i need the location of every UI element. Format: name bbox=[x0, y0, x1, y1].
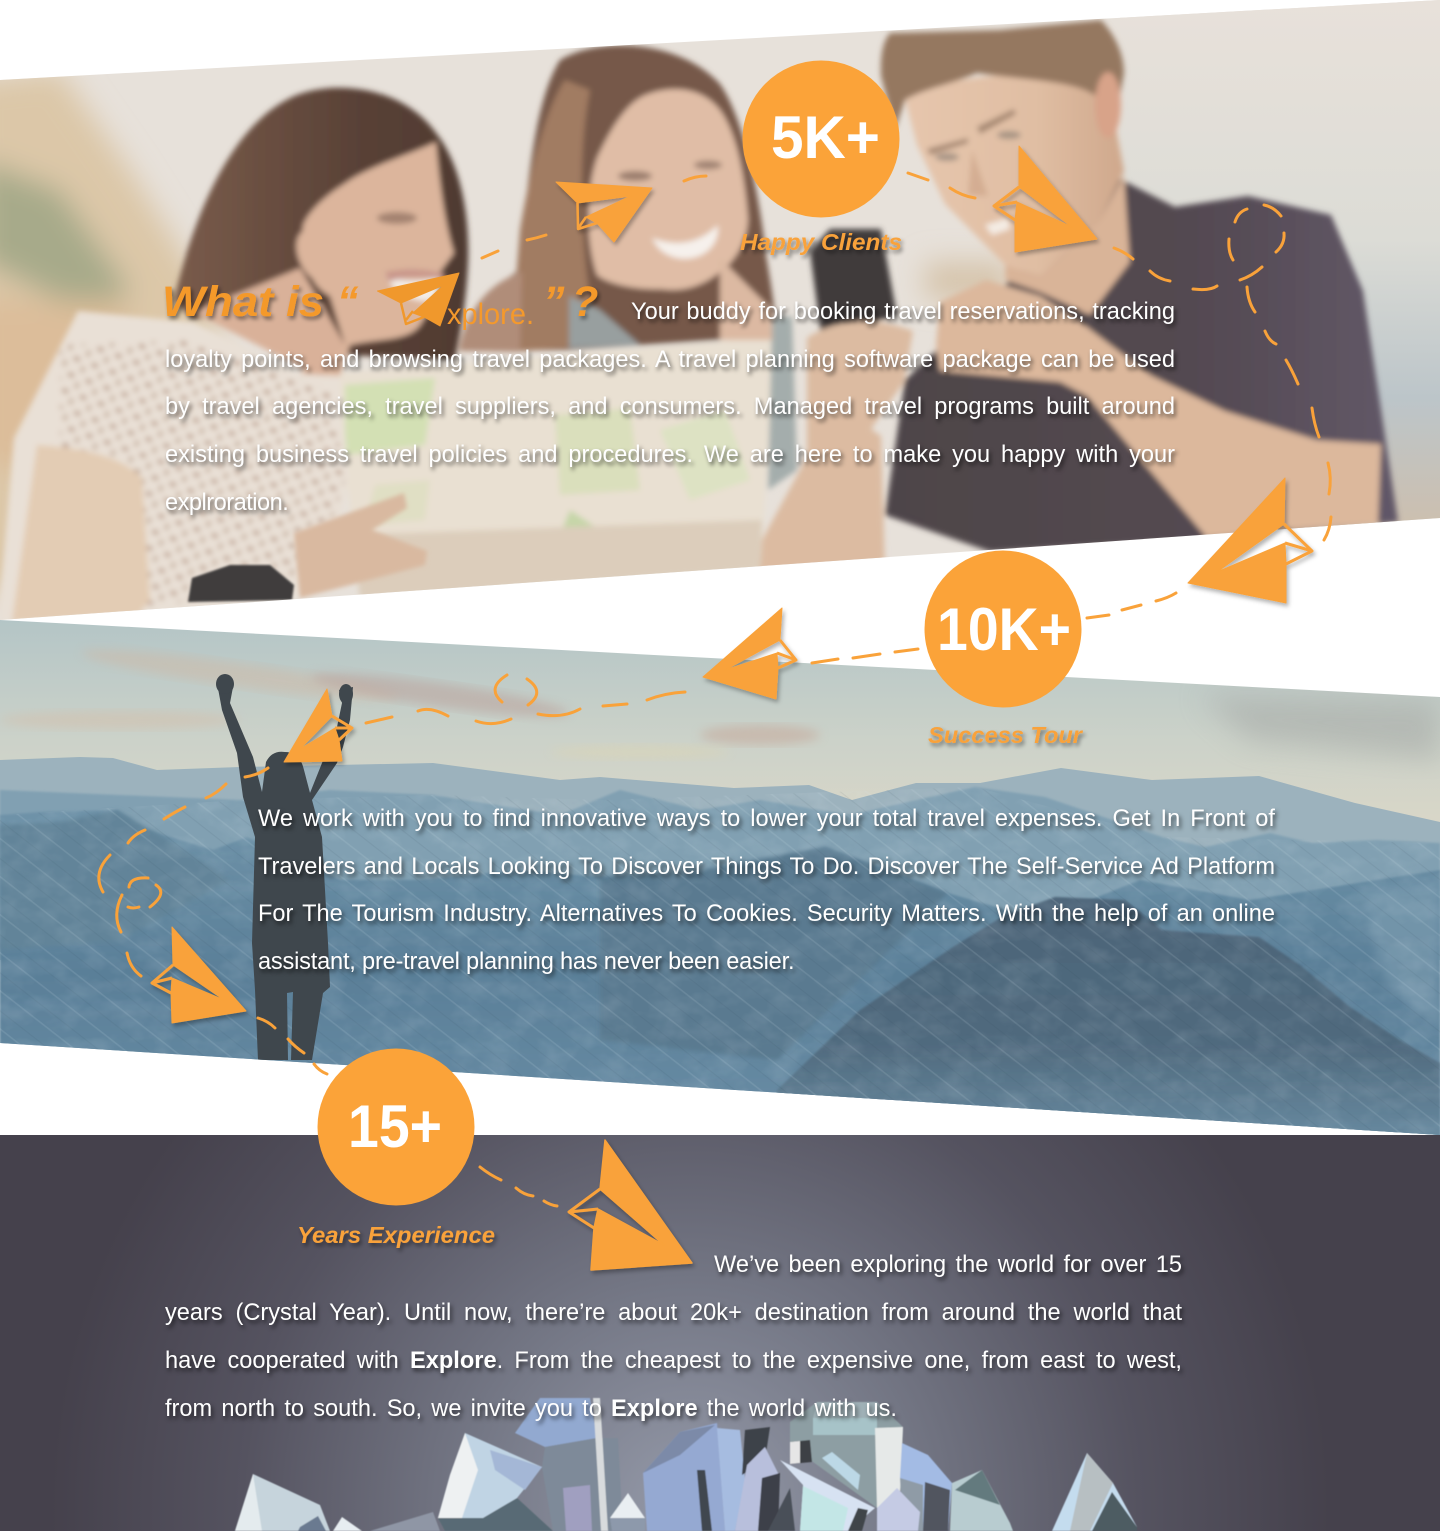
section three paragraph: years (Crystal Year). Until now, there’re about 20k+ destination from around the world that bbox=[165, 1300, 1182, 1326]
section three paragraph: We’ve been exploring the world for over 15 bbox=[714, 1252, 1182, 1278]
middle woman sweater bbox=[569, 296, 640, 348]
section one paragraph: existing business travel policies and procedures. We are here to make you happy with your bbox=[165, 442, 1175, 468]
mountain body bbox=[0, 810, 1440, 1140]
left woman lace top bbox=[0, 311, 349, 622]
section three paragraph: from north to south. So, we invite you to Explore the world with us. bbox=[165, 1396, 897, 1422]
heading: What is Explore: ? bbox=[572, 278, 598, 326]
heading: What is Explore bbox=[162, 273, 598, 331]
middle mountain ridge bbox=[0, 787, 1440, 1140]
heading: What is Explore: xplore. bbox=[447, 298, 534, 331]
section two paragraph: Travelers and Locals Looking To Discover Things To Do. Discover The Self-Service Ad Platform bbox=[258, 854, 1275, 880]
stat badge: 15+ Years Experience bbox=[297, 1048, 495, 1248]
icon: paper plane left of 10K badge bbox=[703, 608, 796, 699]
middle woman hair bbox=[510, 44, 778, 354]
left woman face and chest bbox=[296, 142, 454, 395]
far mountain ridge bbox=[0, 757, 1440, 960]
section two paragraph: We work with you to find innovative ways to lower your total travel expenses. Get In Front of bbox=[258, 806, 1275, 832]
man ear bbox=[1095, 72, 1121, 138]
icon: paper plane near man's face bbox=[994, 146, 1097, 252]
crystal cluster bbox=[235, 1398, 1137, 1531]
section one paragraph: Your buddy for booking travel reservations, tracking bbox=[631, 299, 1175, 325]
man face bbox=[904, 69, 1124, 276]
mountain texture bbox=[0, 785, 1440, 1135]
woman silhouette with raised arms bbox=[216, 674, 353, 1060]
hand with phone bbox=[760, 321, 913, 572]
icon: heading paper plane logo bbox=[378, 273, 459, 326]
map bbox=[346, 338, 765, 527]
stat badge: 5K+ Happy Clients: Happy Clients bbox=[740, 229, 902, 255]
man forearm and fist bbox=[936, 280, 1381, 538]
phone bbox=[810, 229, 897, 335]
heading: What is Explore: “ bbox=[337, 278, 359, 326]
stat badge: 10K+ Success Tour: Success Tour bbox=[928, 722, 1083, 748]
section one paragraph: explroration. bbox=[165, 490, 288, 516]
heading: What is Explore: ” bbox=[543, 278, 565, 326]
left dark mountain bbox=[0, 810, 224, 929]
section one paragraph: loyalty points, and browsing travel packages. A travel planning software package can be used bbox=[165, 347, 1175, 373]
woman's hand on map bbox=[294, 493, 427, 598]
stat badge: 10K+ Success Tour: 10K+ bbox=[937, 596, 1071, 663]
dark mountain peak bbox=[760, 897, 1440, 1140]
icon: paper plane by crystal paragraph bbox=[569, 1140, 692, 1270]
icon: paper plane at raised arms bbox=[284, 689, 352, 762]
icon: paper plane right of 10K badge bbox=[1188, 478, 1312, 603]
left woman arm bbox=[12, 445, 150, 622]
stat badge: 15+ Years Experience: 15+ bbox=[348, 1093, 442, 1160]
heading: What is Explore: What is bbox=[162, 278, 324, 326]
stat badge: 5K+ Happy Clients: 5K+ bbox=[771, 104, 880, 171]
panel: mountain summit photo bbox=[0, 610, 1440, 1140]
stat badge: 15+ Years Experience: Years Experience bbox=[297, 1222, 495, 1248]
middle woman face bbox=[588, 89, 748, 290]
dashed flight trail bbox=[99, 173, 1331, 1206]
man hair bbox=[881, 20, 1124, 130]
section three paragraph: have cooperated with Explore. From the cheapest to the expensive one, from east to west, bbox=[165, 1348, 1182, 1374]
section two paragraph: For The Tourism Industry. Alternatives To Cookies. Security Matters. With the help of an online bbox=[258, 901, 1275, 927]
camera bbox=[188, 565, 294, 602]
panel: crystal section background bbox=[0, 1135, 1440, 1531]
central dark mountain bbox=[600, 847, 948, 1060]
man shirt bbox=[885, 178, 1398, 552]
icon: paper plane lower left bbox=[152, 927, 246, 1023]
panel: friends with map photo bbox=[0, 0, 1440, 625]
section two paragraph: assistant, pre-travel planning has never been easier. bbox=[258, 949, 794, 975]
stat badge: 10K+ Success Tour bbox=[924, 550, 1083, 748]
stat badge: 5K+ Happy Clients bbox=[740, 60, 902, 255]
man neck bbox=[1005, 175, 1130, 315]
section one paragraph: by travel agencies, travel suppliers, and consumers. Managed travel programs built around bbox=[165, 394, 1175, 420]
icon: paper plane near middle woman bbox=[556, 182, 652, 242]
left woman hair bbox=[174, 88, 468, 360]
